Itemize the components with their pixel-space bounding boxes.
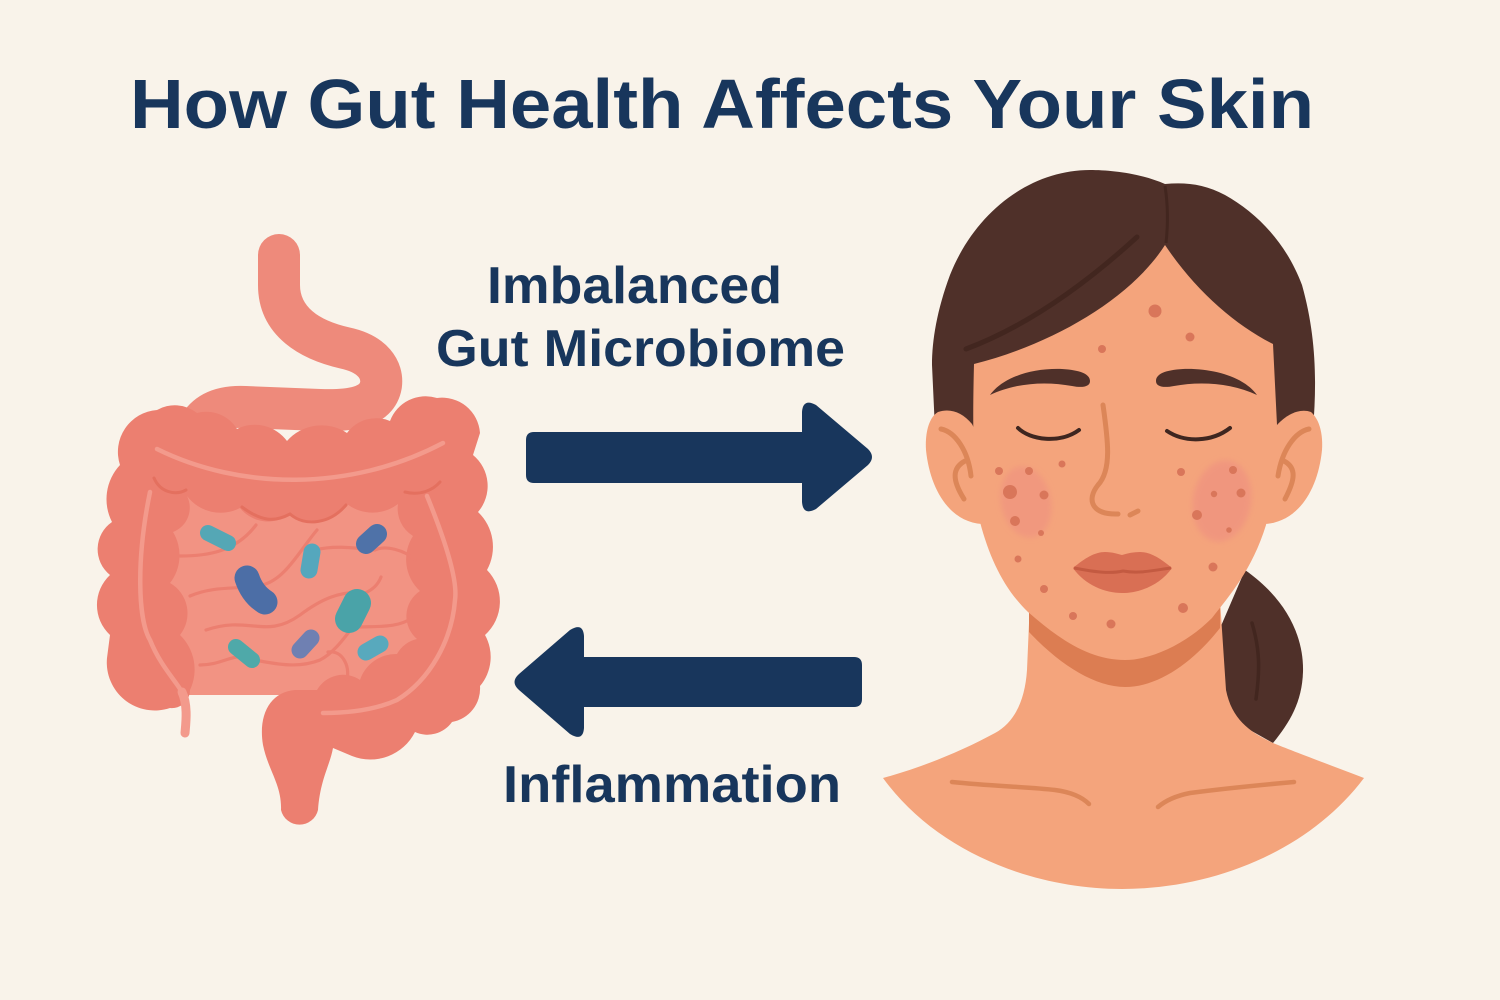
arrow: skin to gut — [514, 627, 862, 737]
label: imbalanced gut microbiome: Imbalanced — [487, 257, 782, 315]
colon highlight lines — [140, 443, 455, 713]
label: imbalanced gut microbiome: Gut Microbiome — [436, 320, 845, 378]
collarbones — [952, 782, 1294, 807]
neck shadow — [1029, 600, 1220, 687]
neck and shoulders — [883, 600, 1364, 889]
cheek rash — [994, 456, 1258, 546]
acne spots — [995, 304, 1246, 628]
hair — [932, 170, 1315, 440]
colon — [97, 396, 500, 825]
right ear — [1255, 411, 1322, 524]
appendix — [182, 692, 186, 733]
closed eyes — [1018, 428, 1230, 439]
icon: woman's face with acne — [883, 170, 1364, 889]
ponytail — [1215, 570, 1303, 743]
left ear — [926, 410, 995, 524]
hair strand — [966, 237, 1137, 349]
label: imbalanced gut microbiome — [436, 257, 845, 378]
label: inflammation: Inflammation — [503, 756, 841, 814]
hair parting — [1165, 186, 1167, 243]
arrow: gut to skin — [526, 403, 872, 511]
bacteria — [208, 533, 380, 660]
inner belly fill — [165, 490, 427, 695]
eyebrows — [990, 369, 1257, 395]
ponytail strand — [1252, 623, 1259, 699]
lips — [1073, 552, 1172, 593]
title: How Gut Health Affects Your Skin — [130, 65, 1314, 143]
colon crease lines — [154, 478, 440, 522]
small intestine folds — [180, 525, 415, 680]
face — [973, 245, 1277, 660]
nose — [1092, 405, 1138, 515]
ear details — [941, 429, 1309, 499]
icon: intestines with gut bacteria — [97, 255, 500, 825]
small intestine upper tube — [198, 255, 381, 428]
